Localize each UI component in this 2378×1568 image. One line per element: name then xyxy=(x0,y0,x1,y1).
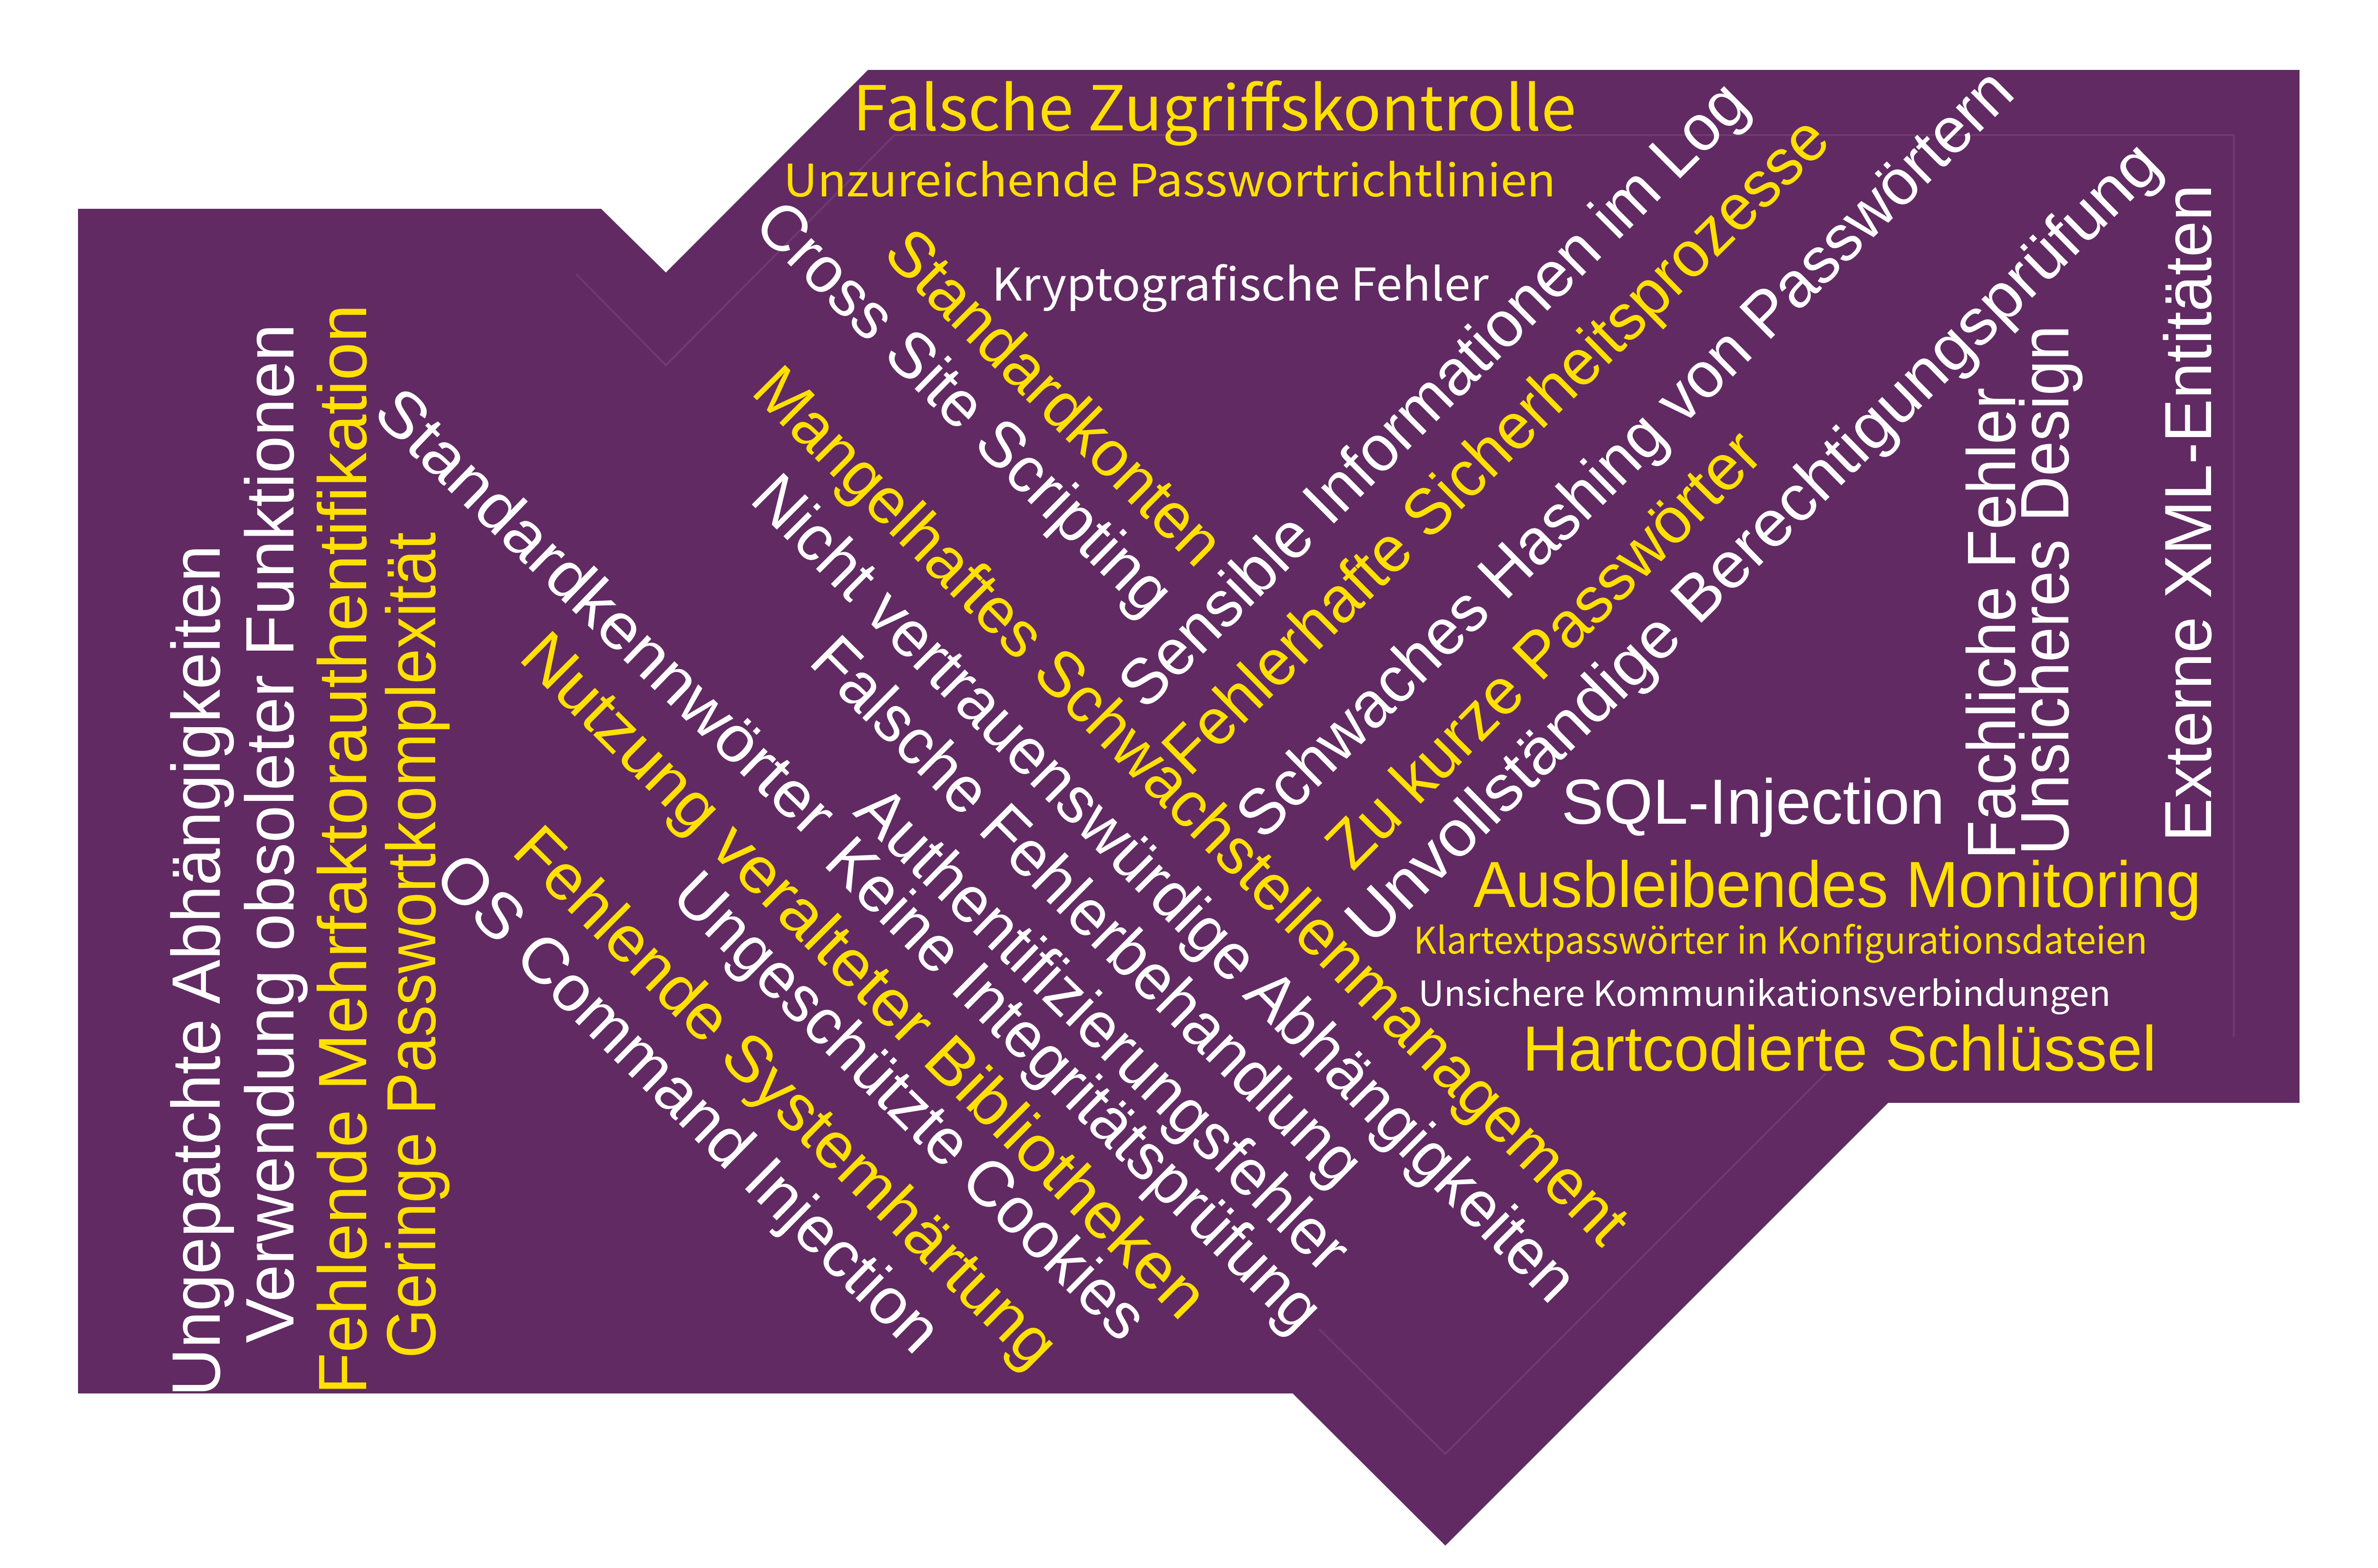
text: Zu kurze Passwoerter: Zu kurze Passwörter xyxy=(1311,416,1775,882)
text: Verwendung obsoleter Funktionen: Verwendung obsoleter Funktionen xyxy=(232,324,308,1343)
text: Fehlende Systemhaertung: Fehlende Systemhärtung xyxy=(500,811,1073,1381)
text: Nicht vertrauenswuerdige Abhaengigkeiten: Nicht vertrauenswürdige Abhängigkeiten xyxy=(738,459,1592,1316)
text: Standardkonten: Standardkonten xyxy=(871,214,1238,580)
text: Fachliche Fehler: Fachliche Fehler xyxy=(1953,388,2030,859)
text: Sensible Informationen im Log: Sensible Informationen im Log xyxy=(1104,66,1761,721)
text: SQL-Injection: SQL-Injection xyxy=(1561,767,1945,838)
text: Fehlende Mehrfaktorauthentifikation: Fehlende Mehrfaktorauthentifikation xyxy=(304,304,381,1394)
text: Nutzung veralteter Bibliotheken: Nutzung veralteter Bibliotheken xyxy=(507,617,1222,1333)
word cloud xyxy=(158,54,2225,1396)
text: Ungepatchte Abhaengigkeiten: Ungepatchte Abhängigkeiten xyxy=(158,545,234,1396)
text: Geringe Passwortkomplexitaet: Geringe Passwortkomplexität xyxy=(372,532,450,1358)
text: Unsichere Kommunikationsverbindungen: Unsichere Kommunikationsverbindungen xyxy=(1418,966,2111,1016)
text: Fehlerhafte Sicherheitsprozesse: Fehlerhafte Sicherheitsprozesse xyxy=(1148,102,1843,788)
text: Keine Integritaetspruefung: Keine Integritätsprüfung xyxy=(812,823,1337,1345)
text: OS Command Injection: OS Command Injection xyxy=(421,838,956,1367)
text: Hartcodierte Schluessel: Hartcodierte Schlüssel xyxy=(1522,1013,2156,1084)
text: Externe XML-Entitaeten: Externe XML-Entitäten xyxy=(2151,185,2225,842)
text: Schwaches Hashing von Passwoertern: Schwaches Hashing von Passwörtern xyxy=(1221,54,2027,852)
text: Standardkennwoerter: Standardkennwörter xyxy=(361,373,850,850)
text: Unsicheres Design: Unsicheres Design xyxy=(2007,325,2083,855)
text: Ungeschuetzte Cookies: Ungeschützte Cookies xyxy=(659,857,1162,1354)
text: Cross Site Scripting: Cross Site Scripting xyxy=(741,186,1188,629)
text: Unzureichende Passwortrichtlinien: Unzureichende Passwortrichtlinien xyxy=(783,145,1556,210)
text: Ausbleibendes Monitoring: Ausbleibendes Monitoring xyxy=(1473,848,2201,921)
text: Mangelhaftes Schwachstellenmanagement: Mangelhaftes Schwachstellenmanagement xyxy=(740,351,1644,1258)
text: Klartextpasswoerter in Konfigurationsdateien: Klartextpasswörter in Konfigurationsdateien xyxy=(1413,912,2147,964)
text: Authentifizierungsfehler: Authentifizierungsfehler xyxy=(842,771,1364,1286)
text: Kryptografische Fehler: Kryptografische Fehler xyxy=(992,249,1489,314)
text: Falsche Zugriffskontrolle: Falsche Zugriffskontrolle xyxy=(853,59,1576,148)
text: Falsche Fehlerbehandlung: Falsche Fehlerbehandlung xyxy=(797,622,1378,1199)
text: Unvollstaendige Berechtigungspruefung: Unvollständige Berechtigungsprüfung xyxy=(1331,127,2174,957)
